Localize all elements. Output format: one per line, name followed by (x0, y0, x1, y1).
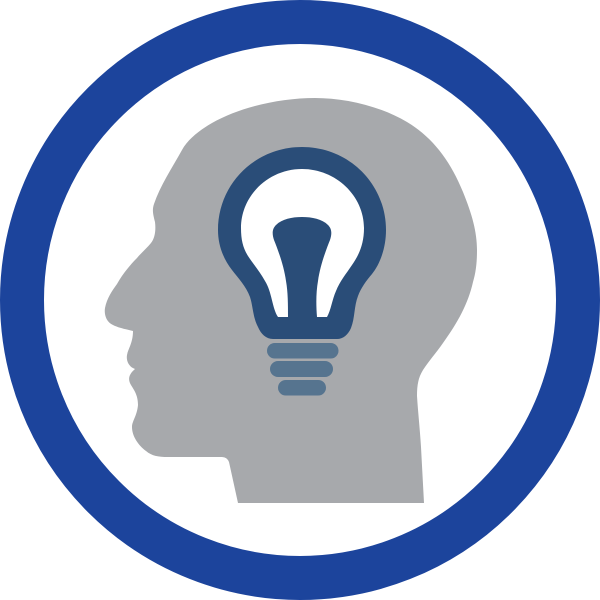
bulb base thread 2 (270, 361, 333, 377)
bulb base thread 1 (267, 343, 338, 358)
icon: head silhouette (105, 98, 477, 503)
icon: light bulb (218, 147, 386, 396)
bulb base thread 3 (278, 380, 326, 396)
bulb glass outline (218, 147, 386, 339)
bulb glass interior (241, 169, 364, 317)
